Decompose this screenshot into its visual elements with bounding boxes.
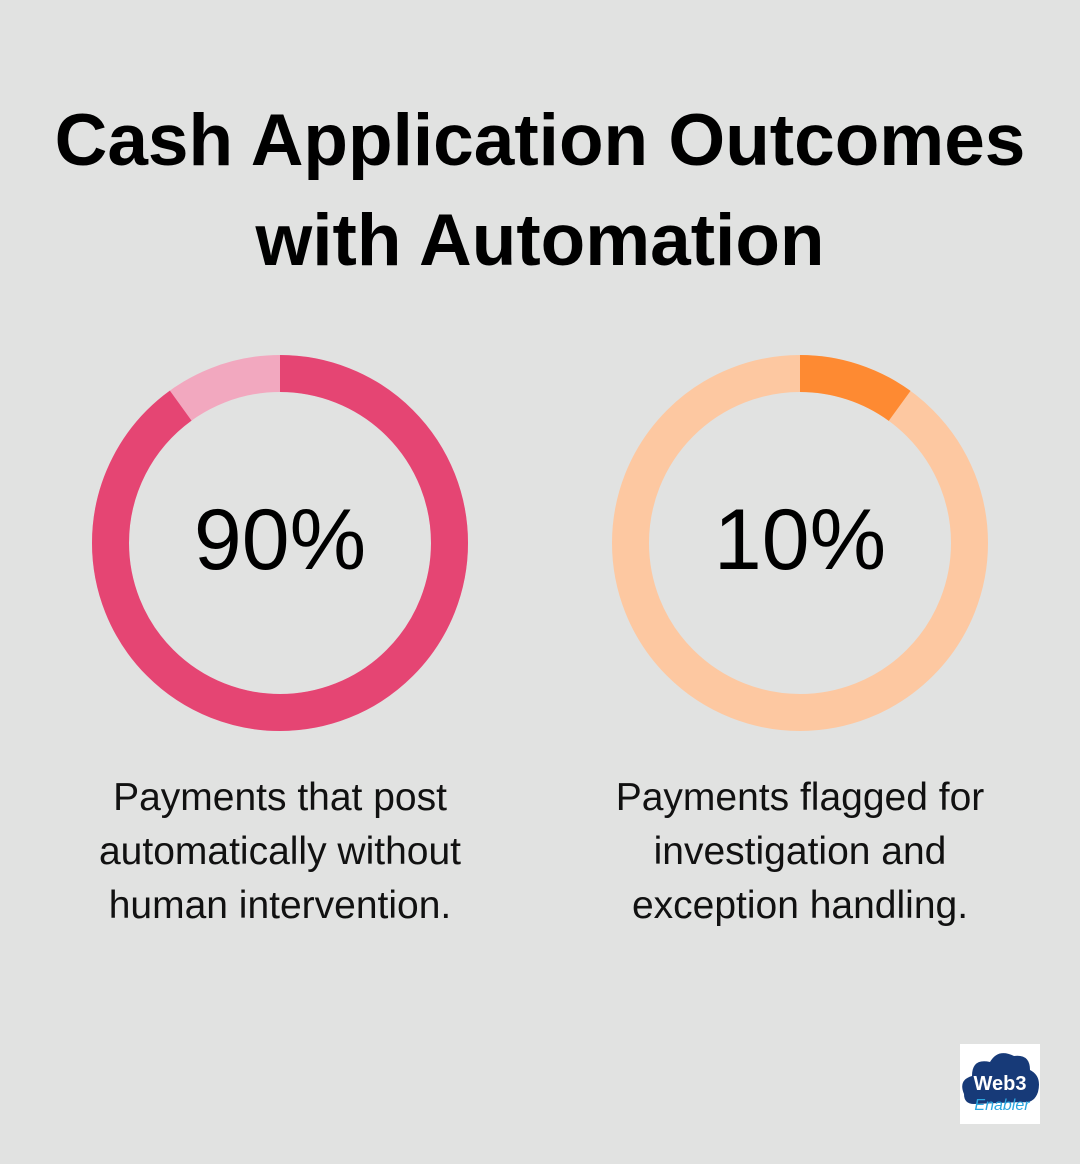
caption left: automatically without	[99, 830, 461, 873]
caption left: Payments that post	[113, 776, 447, 819]
caption left	[99, 776, 461, 927]
title	[55, 100, 1025, 281]
title: with Automation	[255, 200, 825, 281]
donut left	[110, 374, 450, 712]
donut left: 90%	[194, 492, 366, 588]
donut right	[630, 374, 970, 712]
donut right: 10%	[714, 492, 886, 588]
caption left: human intervention.	[109, 884, 451, 927]
title: Cash Application Outcomes	[55, 100, 1025, 181]
logo: Web3	[974, 1073, 1026, 1095]
caption right: investigation and	[654, 830, 946, 873]
logo	[960, 1044, 1040, 1124]
logo: Enabler	[974, 1097, 1030, 1114]
caption right	[616, 776, 984, 927]
caption right: exception handling.	[632, 884, 968, 927]
caption right: Payments flagged for	[616, 776, 984, 819]
